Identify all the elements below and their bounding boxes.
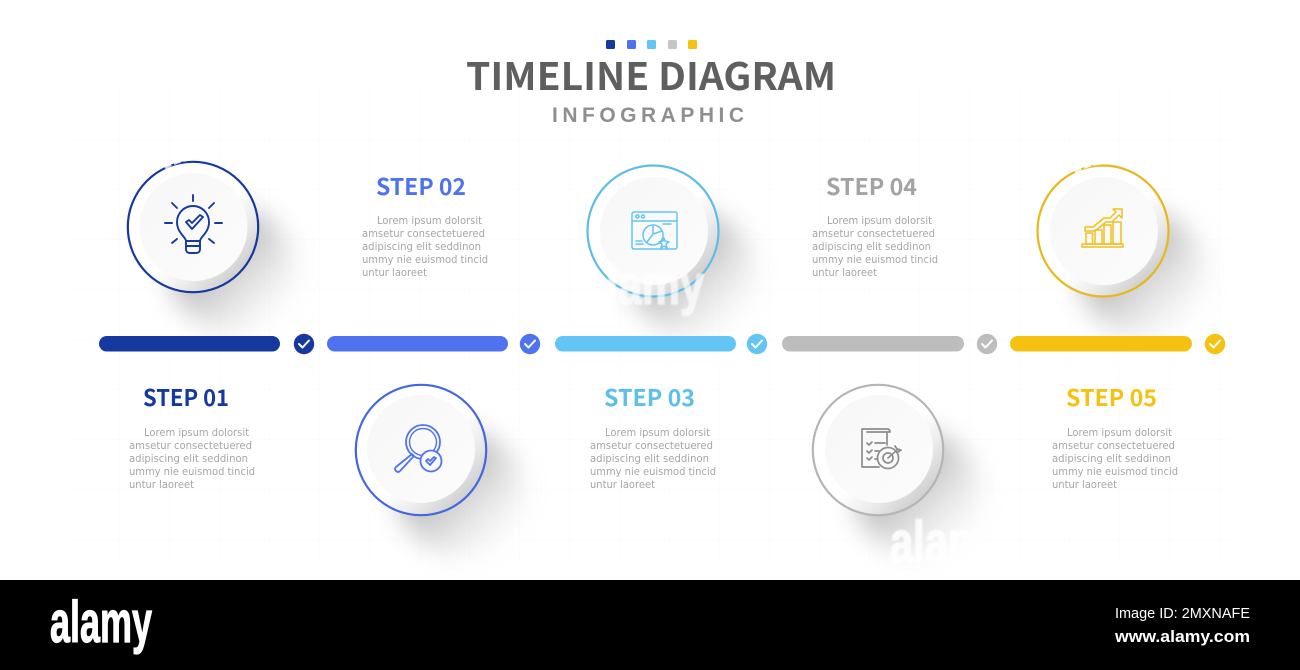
check marker 1 <box>294 334 314 354</box>
panel: step 02 circle <box>356 385 523 556</box>
timeline bar 4 <box>782 336 964 352</box>
text block: step 05: Lorem ipsum dolorsit <box>1067 427 1172 439</box>
text block: step 03: Lorem ipsum dolorsit <box>605 427 710 439</box>
text block: step 03: ummy nie euismod tincid <box>590 466 716 478</box>
text block: step 01: amsetur consectetuered <box>129 440 252 452</box>
check marker 3 <box>747 334 767 354</box>
text block: step 03 <box>590 427 716 491</box>
text block: step 05 <box>1052 427 1178 491</box>
timeline bar 5 <box>1010 336 1192 352</box>
heading: step 01: STEP 01 <box>143 379 229 413</box>
footer logo: alamy <box>50 590 152 655</box>
watermark fragment below step 04 circle: alam <box>890 510 985 575</box>
text block: step 03: untur laoreet <box>590 479 655 491</box>
text block: step 04: adipiscing elit seddinon <box>812 241 931 253</box>
text block: step 05: ummy nie euismod tincid <box>1052 466 1178 478</box>
footer url: www.alamy.com <box>1114 627 1250 646</box>
heading: step 03: STEP 03 <box>604 379 695 413</box>
text block: step 04: untur laoreet <box>812 267 877 279</box>
check marker 2 <box>520 334 540 354</box>
text block: step 04: amsetur consectetuered <box>812 228 935 240</box>
legend: colour squares <box>606 40 697 49</box>
timeline bar 2 <box>327 336 508 352</box>
text block: step 01: ummy nie euismod tincid <box>129 466 255 478</box>
watermark fragment over step 03 circle: lamy <box>606 253 704 316</box>
panel: step 01 circle <box>128 159 295 333</box>
icon: growth chart <box>1082 209 1123 247</box>
footer image id: Image ID: 2MXNAFE <box>1115 605 1250 622</box>
text block: step 05: untur laoreet <box>1052 479 1117 491</box>
text block: step 01: untur laoreet <box>129 479 194 491</box>
text block: step 01: Lorem ipsum dolorsit <box>144 427 249 439</box>
text block: step 03: adipiscing elit seddinon <box>590 453 709 465</box>
panel: step 03 circle <box>588 166 755 337</box>
footer band <box>0 580 1300 670</box>
text block: step 02: amsetur consectetuered <box>362 228 485 240</box>
text block: step 04: Lorem ipsum dolorsit <box>827 215 932 227</box>
text block: step 02: untur laoreet <box>362 267 427 279</box>
panel: step 05 circle <box>1038 163 1205 337</box>
text block: step 02: ummy nie euismod tincid <box>362 254 488 266</box>
check marker 5 <box>1205 334 1225 354</box>
subtitle: INFOGRAPHIC <box>552 104 744 127</box>
icon: checklist with target <box>862 429 901 468</box>
icon: light bulb <box>165 195 222 253</box>
timeline bar 3 <box>555 336 736 352</box>
check marker 4 <box>977 334 997 354</box>
text block: step 02: Lorem ipsum dolorsit <box>377 215 482 227</box>
text block: step 05: adipiscing elit seddinon <box>1052 453 1171 465</box>
icon: browser with pie chart <box>632 212 677 249</box>
heading: step 04: STEP 04 <box>826 168 917 202</box>
timeline bar 1 <box>99 336 280 352</box>
heading: step 02: STEP 02 <box>376 168 466 202</box>
heading: step 05: STEP 05 <box>1066 379 1157 413</box>
title: TIMELINE DIAGRAM <box>466 46 836 101</box>
text block: step 02: adipiscing elit seddinon <box>362 241 481 253</box>
text block: step 02 <box>362 215 488 279</box>
text block: step 04 <box>812 215 938 279</box>
text block: step 04: ummy nie euismod tincid <box>812 254 938 266</box>
panel: step 04 circle <box>813 385 980 556</box>
text block: step 01: adipiscing elit seddinon <box>129 453 248 465</box>
text block: step 05: amsetur consectetuered <box>1052 440 1175 452</box>
text block: step 01 <box>129 427 255 491</box>
text block: step 03: amsetur consectetuered <box>590 440 713 452</box>
icon: magnifier with check <box>395 425 442 472</box>
